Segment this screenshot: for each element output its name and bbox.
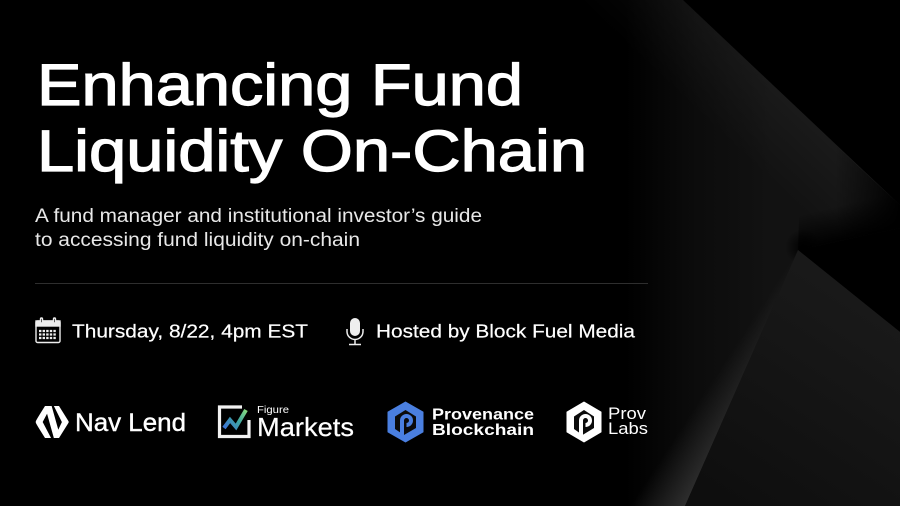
Figure wordmark: Figure	[257, 404, 289, 416]
event date	[36, 318, 308, 342]
Prov Labs wordmark: Prov	[608, 404, 647, 423]
logo: Prov Labs: Labs	[608, 419, 648, 438]
icon: Provenance hexagon	[388, 402, 423, 442]
logo: Nav Lend	[36, 406, 185, 438]
subtitle: A fund manager and institutional investor’s guide	[35, 206, 482, 227]
Markets wordmark: Markets	[257, 412, 354, 442]
Provenance Blockchain wordmark: Provenance	[432, 406, 534, 424]
Nav Lend wordmark: Nav Lend	[75, 409, 186, 437]
title: Liquidity On-Chain	[37, 119, 587, 184]
background facets	[560, 0, 900, 506]
logo: Provenance Blockchain: Blockchain	[432, 422, 534, 439]
logo: Provenance Blockchain	[388, 402, 534, 442]
title: Enhancing Fund	[37, 53, 523, 118]
divider	[35, 283, 648, 284]
host text: Hosted by Block Fuel Media	[376, 320, 636, 342]
icon: Figure Markets mark	[220, 407, 249, 436]
title	[37, 53, 587, 184]
date text: Thursday, 8/22, 4pm EST	[72, 320, 308, 342]
icon: Nav Lend mark	[39, 401, 66, 443]
host	[347, 318, 636, 344]
subtitle: to accessing fund liquidity on-chain	[35, 230, 360, 251]
logo: Prov Labs	[567, 402, 648, 442]
logo: Figure Markets	[220, 404, 354, 442]
icon: microphone	[347, 318, 363, 344]
icon: calendar	[36, 318, 60, 342]
subtitle	[35, 206, 482, 251]
icon: Prov Labs hexagon	[567, 402, 601, 442]
